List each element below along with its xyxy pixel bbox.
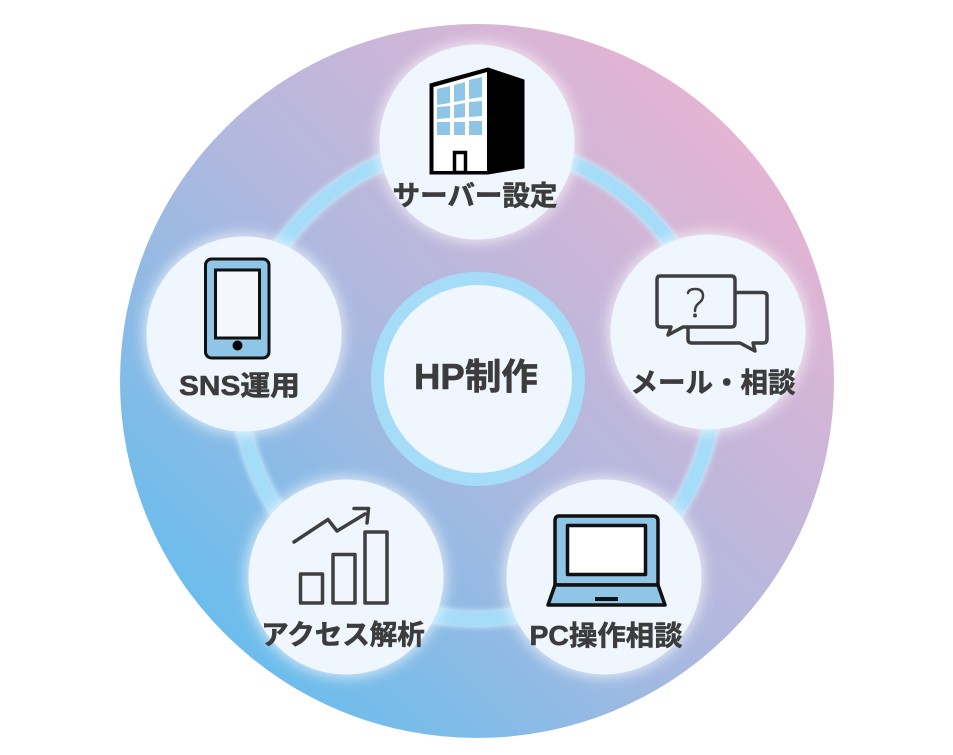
background gradient circle bbox=[120, 24, 834, 738]
icon: smartphone bbox=[206, 259, 269, 358]
label: PC操作相談 bbox=[530, 620, 682, 651]
center label: HP制作 bbox=[414, 356, 538, 397]
node: メール・相談 bbox=[608, 232, 808, 432]
label: アクセス解析 bbox=[261, 619, 425, 650]
node: アクセス解析 bbox=[246, 477, 446, 677]
icon: growth chart bbox=[294, 508, 387, 603]
center circle: HP制作 bbox=[378, 278, 578, 480]
icon: speech bubbles bbox=[657, 276, 767, 351]
label: メール・相談 bbox=[630, 367, 796, 398]
node: PC操作相談 bbox=[504, 477, 704, 677]
icon: office building bbox=[430, 68, 524, 174]
label: サーバー設定 bbox=[393, 180, 557, 211]
label: SNS運用 bbox=[179, 370, 300, 401]
connecting ring bbox=[239, 143, 715, 619]
icon: laptop bbox=[548, 516, 665, 605]
node: SNS運用 bbox=[144, 234, 344, 434]
node: サーバー設定 bbox=[377, 42, 577, 242]
